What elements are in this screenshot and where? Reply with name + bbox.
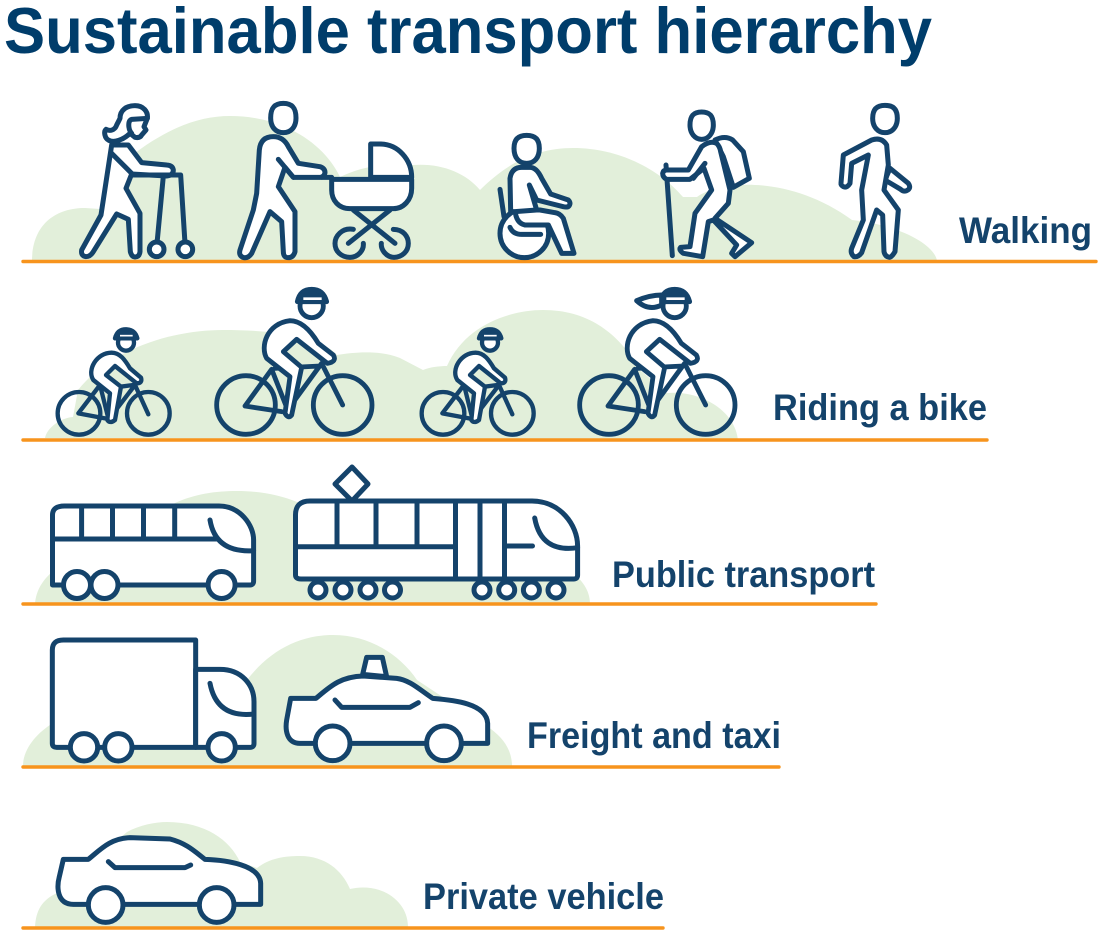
ground line: freight and taxi — [23, 765, 779, 769]
icon: person in wheelchair — [500, 135, 574, 258]
icon: person pushing pram — [240, 103, 412, 258]
label: private vehicle: Private vehicle — [423, 876, 664, 917]
ground line: public transport — [23, 602, 876, 606]
label: walking: Walking — [959, 210, 1092, 251]
public transport background hills — [35, 491, 590, 604]
panel: freight and taxi — [23, 635, 781, 767]
ground line: walking — [23, 260, 1096, 263]
icon: cyclist with ponytail — [580, 289, 735, 434]
freight background hills — [23, 635, 512, 766]
panel: walking — [23, 103, 1096, 262]
icon: bus — [52, 506, 254, 598]
riding background hills — [45, 310, 738, 440]
icon: taxi — [286, 657, 488, 761]
icon: woman with walking frame — [82, 106, 193, 257]
icon: walking person — [841, 105, 910, 257]
icon: adult cyclist — [217, 289, 372, 434]
panel: public transport — [23, 467, 876, 604]
icon: car — [58, 838, 261, 922]
ground line: riding — [23, 438, 987, 442]
label: public transport: Public transport — [612, 554, 875, 595]
label: riding a bike: Riding a bike — [773, 387, 987, 428]
panel: private vehicle — [23, 822, 664, 928]
private vehicle background hills — [35, 822, 408, 927]
icon: second child cyclist — [422, 329, 534, 435]
icon: truck — [52, 640, 254, 761]
panel: riding a bike — [23, 289, 987, 440]
icon: child cyclist — [58, 329, 170, 435]
icon: hiker with backpack and pole — [663, 112, 752, 257]
ground line: private vehicle — [23, 926, 663, 930]
label: freight and taxi: Freight and taxi — [527, 715, 781, 756]
walking background hills — [32, 116, 937, 261]
icon: tram — [296, 467, 578, 598]
